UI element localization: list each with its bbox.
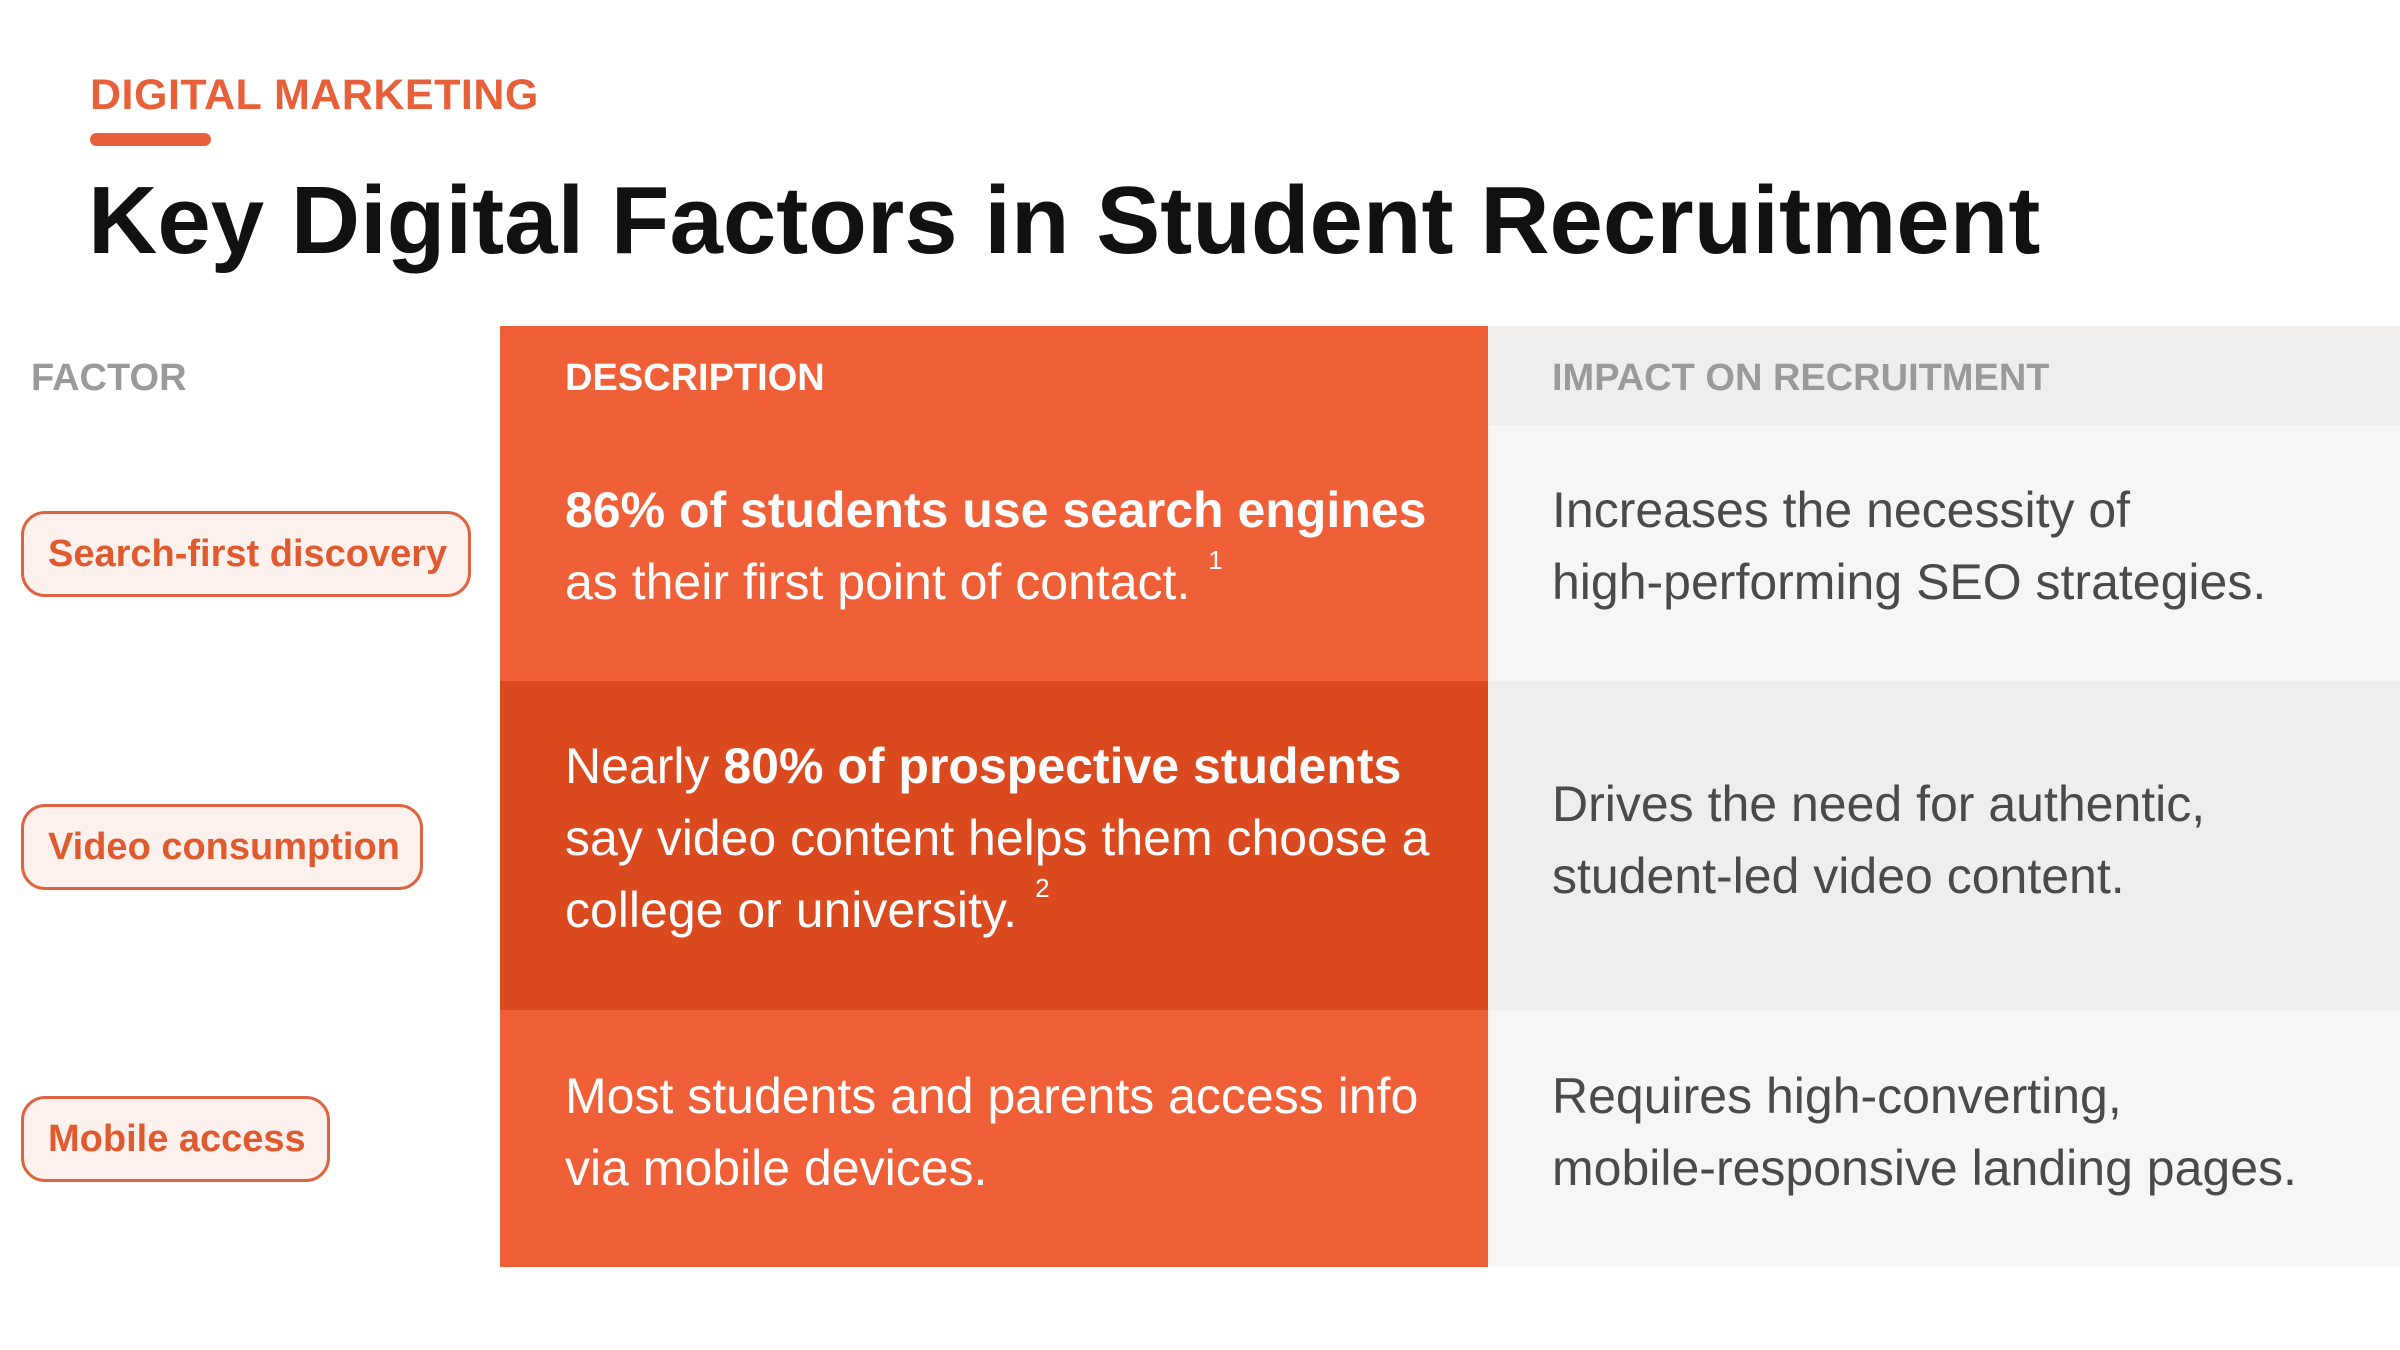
row 2 description: Nearly 80% of prospective students [565, 738, 1401, 794]
row 1 impact: high-performing SEO strategies. [1552, 554, 2266, 610]
row 3 description: Most students and parents access info [565, 1068, 1418, 1124]
row 3 impact: Requires high-converting, [1552, 1068, 2122, 1124]
row 2 impact: student-led video content. [1552, 848, 2125, 904]
header: factor: FACTOR [31, 357, 187, 399]
row 3 impact [1488, 1010, 2400, 1267]
row 1 description: as their first point of contact. 1 [565, 545, 1223, 610]
row 3 impact: mobile-responsive landing pages. [1552, 1140, 2297, 1196]
row 2 description: college or university. 2 [565, 873, 1050, 938]
row 2 impact: Drives the need for authentic, [1552, 776, 2205, 832]
row 2 description [500, 681, 1488, 1010]
kicker: DIGITAL MARKETING [90, 71, 539, 119]
row 2 impact [1488, 681, 2400, 1010]
pill: video consumption: Video consumption [48, 826, 400, 868]
row 1 description [500, 425, 1488, 681]
accent bar [90, 133, 211, 146]
row 1 impact [1488, 425, 2400, 681]
title: Key Digital Factors in Student Recruitment [88, 167, 2040, 274]
row 1 description: 86% of students use search engines [565, 482, 1426, 538]
row 2 description: say video content helps them choose a [565, 810, 1429, 866]
pill: video consumption [21, 804, 423, 890]
header: description: DESCRIPTION [565, 357, 825, 399]
pill: search-first discovery [21, 511, 471, 597]
row 3 description: via mobile devices. [565, 1140, 987, 1196]
pill: mobile access [21, 1096, 330, 1182]
row 3 description [500, 1010, 1488, 1267]
pill: search-first discovery: Search-first discovery [48, 533, 447, 575]
header: impact: IMPACT ON RECRUITMENT [1552, 357, 2050, 399]
header: impact [1488, 326, 2400, 425]
row 1 impact: Increases the necessity of [1552, 482, 2130, 538]
header: description [500, 326, 1488, 425]
pill: mobile access: Mobile access [48, 1118, 306, 1160]
